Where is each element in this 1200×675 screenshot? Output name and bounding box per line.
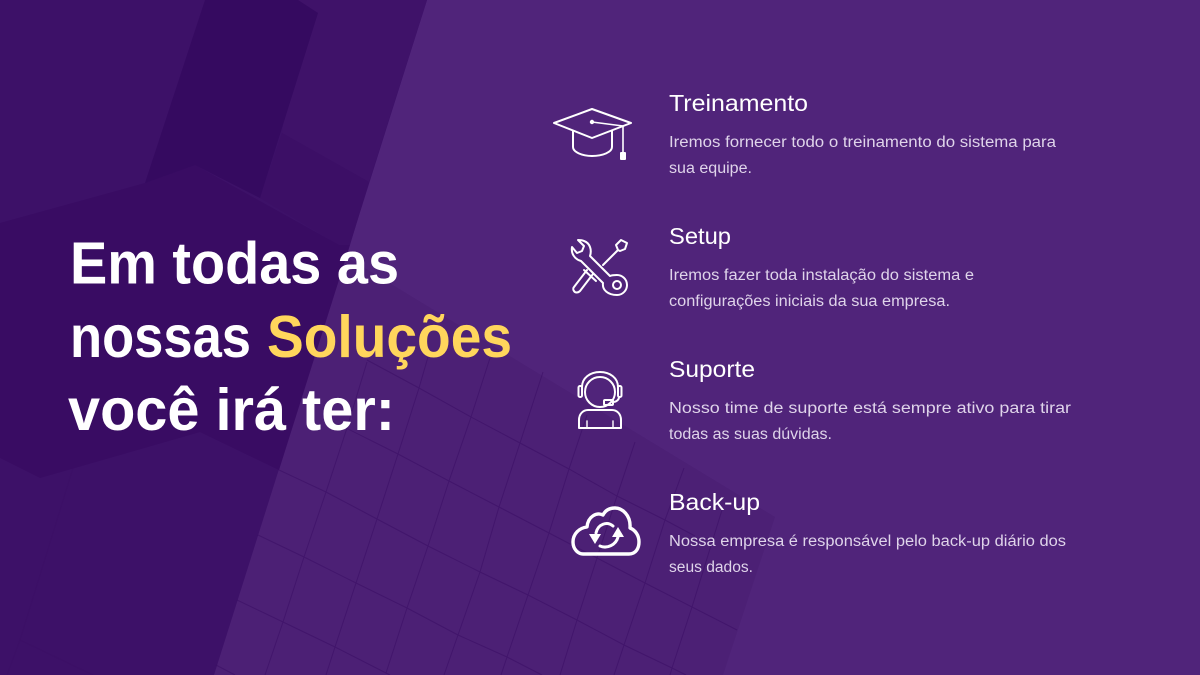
item heading and text: Suporte: todas as suas dúvidas. xyxy=(669,426,832,443)
item heading and text: Treinamento: sua equipe. xyxy=(669,160,752,177)
icon: headset support agent xyxy=(578,372,622,428)
item heading and text: Suporte: Nosso time de suporte está sempre ativo para tirar xyxy=(669,400,1071,417)
icon: wrench and screwdriver xyxy=(572,240,627,295)
item heading and text: Back-up: seus dados. xyxy=(669,559,753,576)
title xyxy=(68,230,512,443)
icon: graduation cap xyxy=(554,109,631,159)
item heading and text: Setup: configurações iniciais da sua empresa. xyxy=(669,293,950,310)
item heading and text: Back-up xyxy=(669,489,1066,576)
item heading and text: Setup: Iremos fazer toda instalação do sistema e xyxy=(669,267,974,284)
title: Em todas as xyxy=(70,230,399,296)
title: nossas xyxy=(70,304,251,370)
item heading and text: Treinamento: Iremos fornecer todo o treinamento do sistema para xyxy=(669,134,1056,151)
item heading and text: Suporte xyxy=(669,356,1071,443)
title: Soluções xyxy=(267,304,512,370)
icon: cloud backup sync xyxy=(573,508,639,554)
item heading and text: Back-up: Nossa empresa é responsável pelo back-up diário dos xyxy=(669,533,1066,550)
item heading and text: Back-up: Back-up xyxy=(669,489,760,515)
item heading and text: Suporte: Suporte xyxy=(669,356,755,382)
title: você irá ter: xyxy=(68,377,395,443)
item heading and text: Treinamento xyxy=(669,90,1056,177)
item heading and text: Setup: Setup xyxy=(669,223,731,249)
item heading and text: Treinamento: Treinamento xyxy=(669,90,808,116)
item heading and text: Setup xyxy=(669,223,974,310)
